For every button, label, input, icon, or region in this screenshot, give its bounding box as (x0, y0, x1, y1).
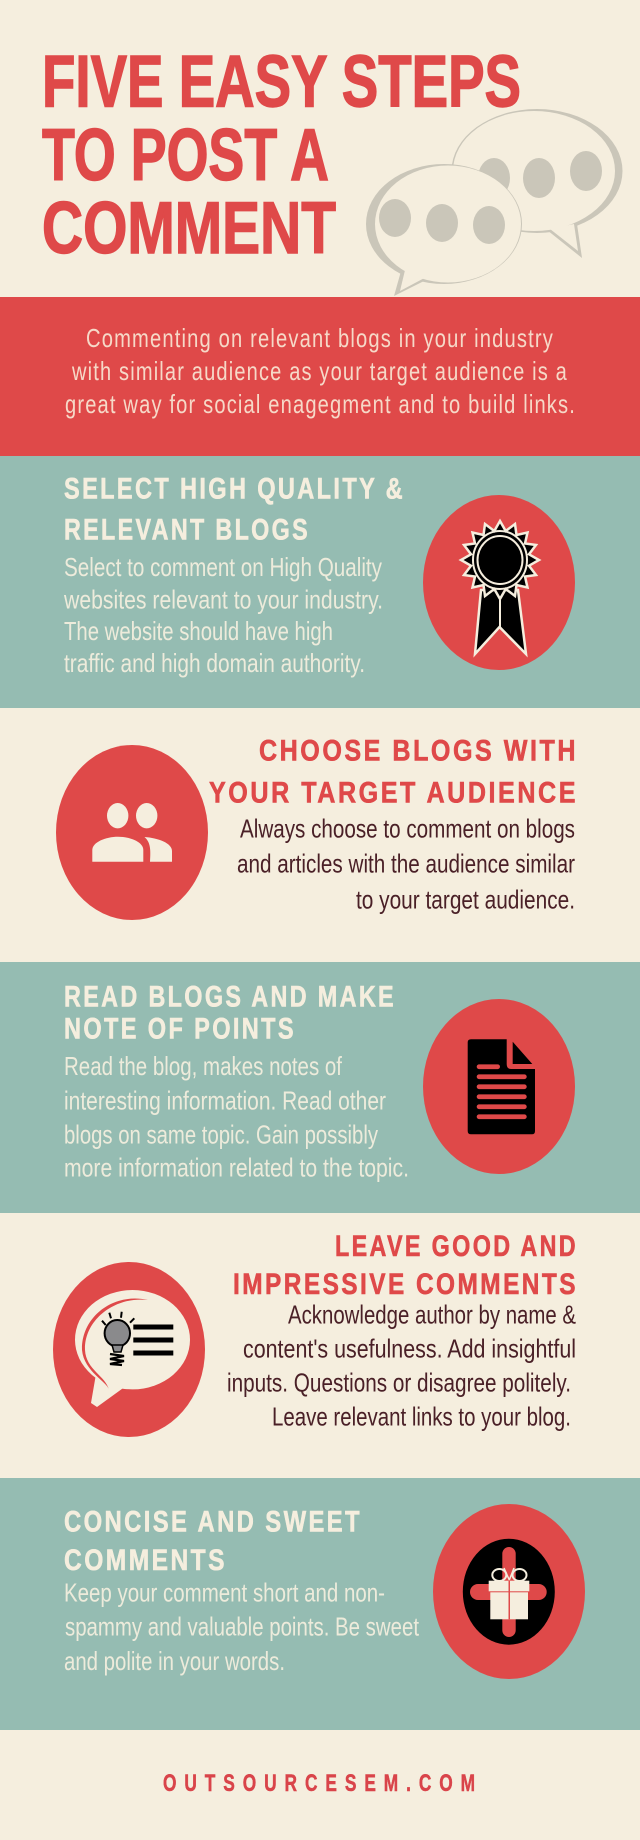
header panel (0, 0, 640, 297)
footer website text: OUTSOURCESEM.COM (163, 1770, 483, 1797)
text: step 3 (64, 1051, 409, 1183)
text: step 1: The website should have high (64, 616, 333, 646)
text: step 5: Keep your comment short and non- (64, 1578, 385, 1608)
text: step 1 (63, 552, 383, 678)
text: step 1: traffic and high domain authority. (64, 648, 365, 678)
heading: step 2: YOUR TARGET AUDIENCE (209, 777, 578, 810)
text: step 3: interesting information. Read other (64, 1085, 386, 1115)
text: step 1: websites relevant to your industry. (63, 584, 383, 614)
heading: step 3 (64, 981, 396, 1045)
text: step 1: Select to comment on High Quality (64, 552, 382, 582)
icon: chat bubbles (366, 109, 622, 296)
heading: step 4 (233, 1230, 578, 1301)
title: COMMENT (42, 188, 336, 269)
text: step 2 (237, 813, 575, 914)
text: step 3: more information related to the topic. (64, 1153, 409, 1183)
panel: step 4 (0, 1213, 640, 1478)
icon: people (56, 745, 208, 920)
heading: step 4: LEAVE GOOD AND (335, 1230, 578, 1263)
text: step 3: Read the blog, makes notes of (64, 1051, 343, 1081)
heading: step 5: COMMENTS (64, 1544, 227, 1577)
text: step 5: and polite in your words. (64, 1646, 285, 1676)
text: step 3: blogs on same topic. Gain possibly (64, 1119, 378, 1149)
text: step 4: content's usefulness. Add insightful (243, 1334, 576, 1364)
text: step 5: spammy and valuable points. Be sweet (65, 1612, 420, 1642)
panel: step 2 (0, 708, 640, 962)
text: step 5 (64, 1578, 420, 1676)
footer (0, 1730, 640, 1840)
icon: speech bubble with light bulb (53, 1262, 205, 1437)
panel: step 3 (0, 962, 640, 1213)
heading: step 5: CONCISE AND SWEET (64, 1506, 362, 1539)
panel: step 5 (0, 1478, 640, 1730)
heading: step 1: RELEVANT BLOGS (64, 513, 310, 546)
title: TO POST A (42, 115, 329, 196)
heading: step 3: NOTE OF POINTS (64, 1012, 296, 1045)
panel: intro (0, 297, 640, 456)
panel: step 1 (0, 456, 640, 708)
icon: gift (433, 1504, 585, 1679)
icon: award ribbon (423, 495, 575, 670)
heading: step 1: SELECT HIGH QUALITY & (64, 472, 405, 505)
heading: step 2 (209, 735, 578, 810)
text: step 2: to your target audience. (356, 884, 575, 914)
heading: step 2: CHOOSE BLOGS WITH (259, 735, 578, 768)
heading: step 3: READ BLOGS AND MAKE (64, 981, 396, 1014)
title (42, 42, 521, 269)
heading: step 5 (64, 1506, 362, 1577)
intro text (65, 323, 576, 419)
text: step 4 (227, 1299, 576, 1432)
heading: step 1 (64, 472, 405, 546)
icon: document (423, 999, 575, 1174)
